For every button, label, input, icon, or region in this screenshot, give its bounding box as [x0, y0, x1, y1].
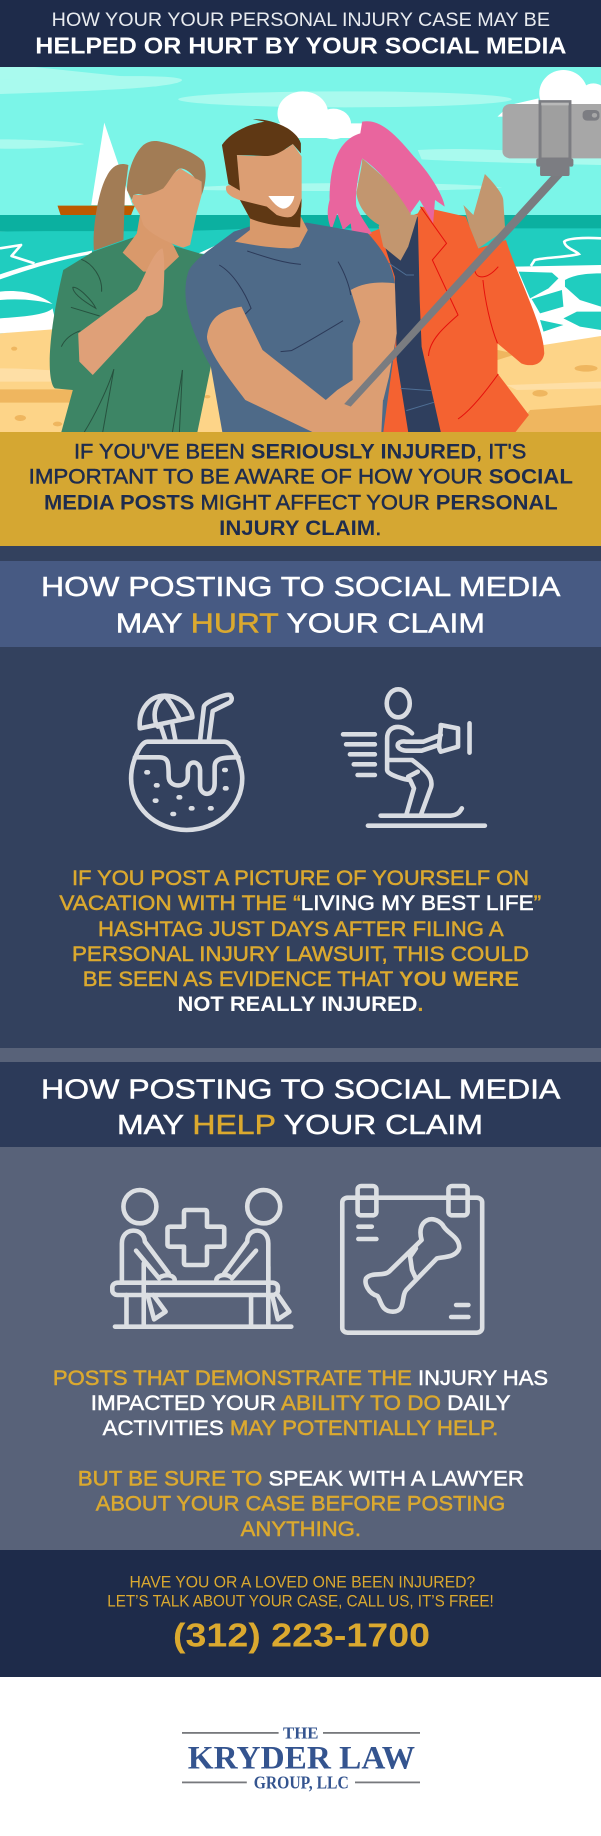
heading: help your claim: HOW POSTING TO SOCIAL MEDIA — [41, 1073, 561, 1104]
text: hurt explanation: HASHTAG JUST DAYS AFTER FILING A — [98, 918, 504, 941]
panel: call to action footer: LET’S TALK ABOUT YOUR CASE, CALL US, IT’S FREE! — [107, 1593, 494, 1611]
text: hurt explanation: VACATION WITH THE “ LIVING MY BEST LIFE ” — [59, 892, 541, 915]
man in blue t-shirt — [185, 119, 397, 432]
text: hurt explanation: PERSONAL INJURY LAWSUIT, THIS COULD — [72, 943, 529, 966]
panel: gold intro band: IMPORTANT TO BE AWARE OF HOW YOUR SOCIAL — [29, 465, 573, 488]
logo: The Kryder Law Group, LLC: GROUP, LLC — [254, 1772, 349, 1792]
panel: call to action footer: (312) 223-1700 — [173, 1617, 430, 1654]
header banner — [0, 0, 601, 67]
panel: how posting may hurt your claim — [0, 546, 601, 1048]
icon: coconut drink with umbrella — [131, 695, 242, 830]
text: help explanation: POSTS THAT DEMONSTRATE THE INJURY HAS — [53, 1367, 548, 1390]
illustration: three friends taking a beach selfie — [0, 67, 601, 432]
text: hurt explanation — [59, 867, 541, 1016]
logo: The Kryder Law Group, LLC: KRYDER LAW — [188, 1740, 415, 1776]
heading: hurt your claim: HOW POSTING TO SOCIAL MEDIA — [41, 571, 561, 602]
text: hurt explanation: BE SEEN AS EVIDENCE THAT YOU WERE — [83, 968, 519, 991]
icon: x-ray of broken bone — [342, 1186, 482, 1333]
text: lawyer advice: BUT BE SURE TO SPEAK WITH A LAWYER — [78, 1468, 524, 1491]
text: help explanation: ACTIVITIES MAY POTENTIALLY HELP. — [103, 1417, 498, 1440]
white surf left — [0, 245, 34, 263]
panel: gold intro band: IF YOU'VE BEEN SERIOUSLY INJURED , IT'S — [74, 440, 526, 463]
text: hurt explanation: IF YOU POST A PICTURE OF YOURSELF ON — [72, 867, 529, 890]
logo: The Kryder Law Group, LLC — [182, 1724, 420, 1792]
text: lawyer advice: ANYTHING. — [241, 1518, 361, 1541]
panel: gold intro band — [0, 432, 601, 546]
selfie stick and phone — [344, 102, 601, 407]
panel: how posting may help your claim — [0, 1048, 601, 1550]
white surf right — [514, 265, 601, 347]
text: help explanation — [53, 1367, 548, 1440]
header banner: HOW YOUR YOUR PERSONAL INJURY CASE MAY BE — [52, 9, 550, 31]
woman in green shirt — [50, 141, 211, 432]
panel: gold intro band: INJURY CLAIM . — [219, 517, 381, 540]
icon: doctor and patient at table — [112, 1190, 291, 1327]
header banner: HELPED OR HURT BY YOUR SOCIAL MEDIA — [35, 32, 567, 58]
text: help explanation: IMPACTED YOUR ABILITY TO DO DAILY — [91, 1392, 511, 1415]
heading: hurt your claim — [0, 561, 601, 647]
panel: call to action footer: HAVE YOU OR A LOVED ONE BEEN INJURED? — [130, 1574, 475, 1592]
panel: gold intro band: MEDIA POSTS MIGHT AFFECT YOUR PERSONAL — [44, 491, 558, 514]
heading: help your claim — [0, 1062, 601, 1147]
text: lawyer advice — [78, 1468, 524, 1541]
heading: hurt your claim: MAY HURT YOUR CLAIM — [116, 607, 485, 638]
text: lawyer advice: ABOUT YOUR CASE BEFORE POSTING — [96, 1493, 505, 1516]
panel: call to action footer — [0, 1550, 601, 1677]
woman in orange jacket — [328, 121, 544, 432]
heading: help your claim: MAY HELP YOUR CLAIM — [117, 1109, 483, 1140]
icon: water skier — [343, 689, 485, 826]
logo: The Kryder Law Group, LLC: THE — [283, 1724, 318, 1743]
text: hurt explanation: NOT REALLY INJURED . — [178, 993, 424, 1016]
